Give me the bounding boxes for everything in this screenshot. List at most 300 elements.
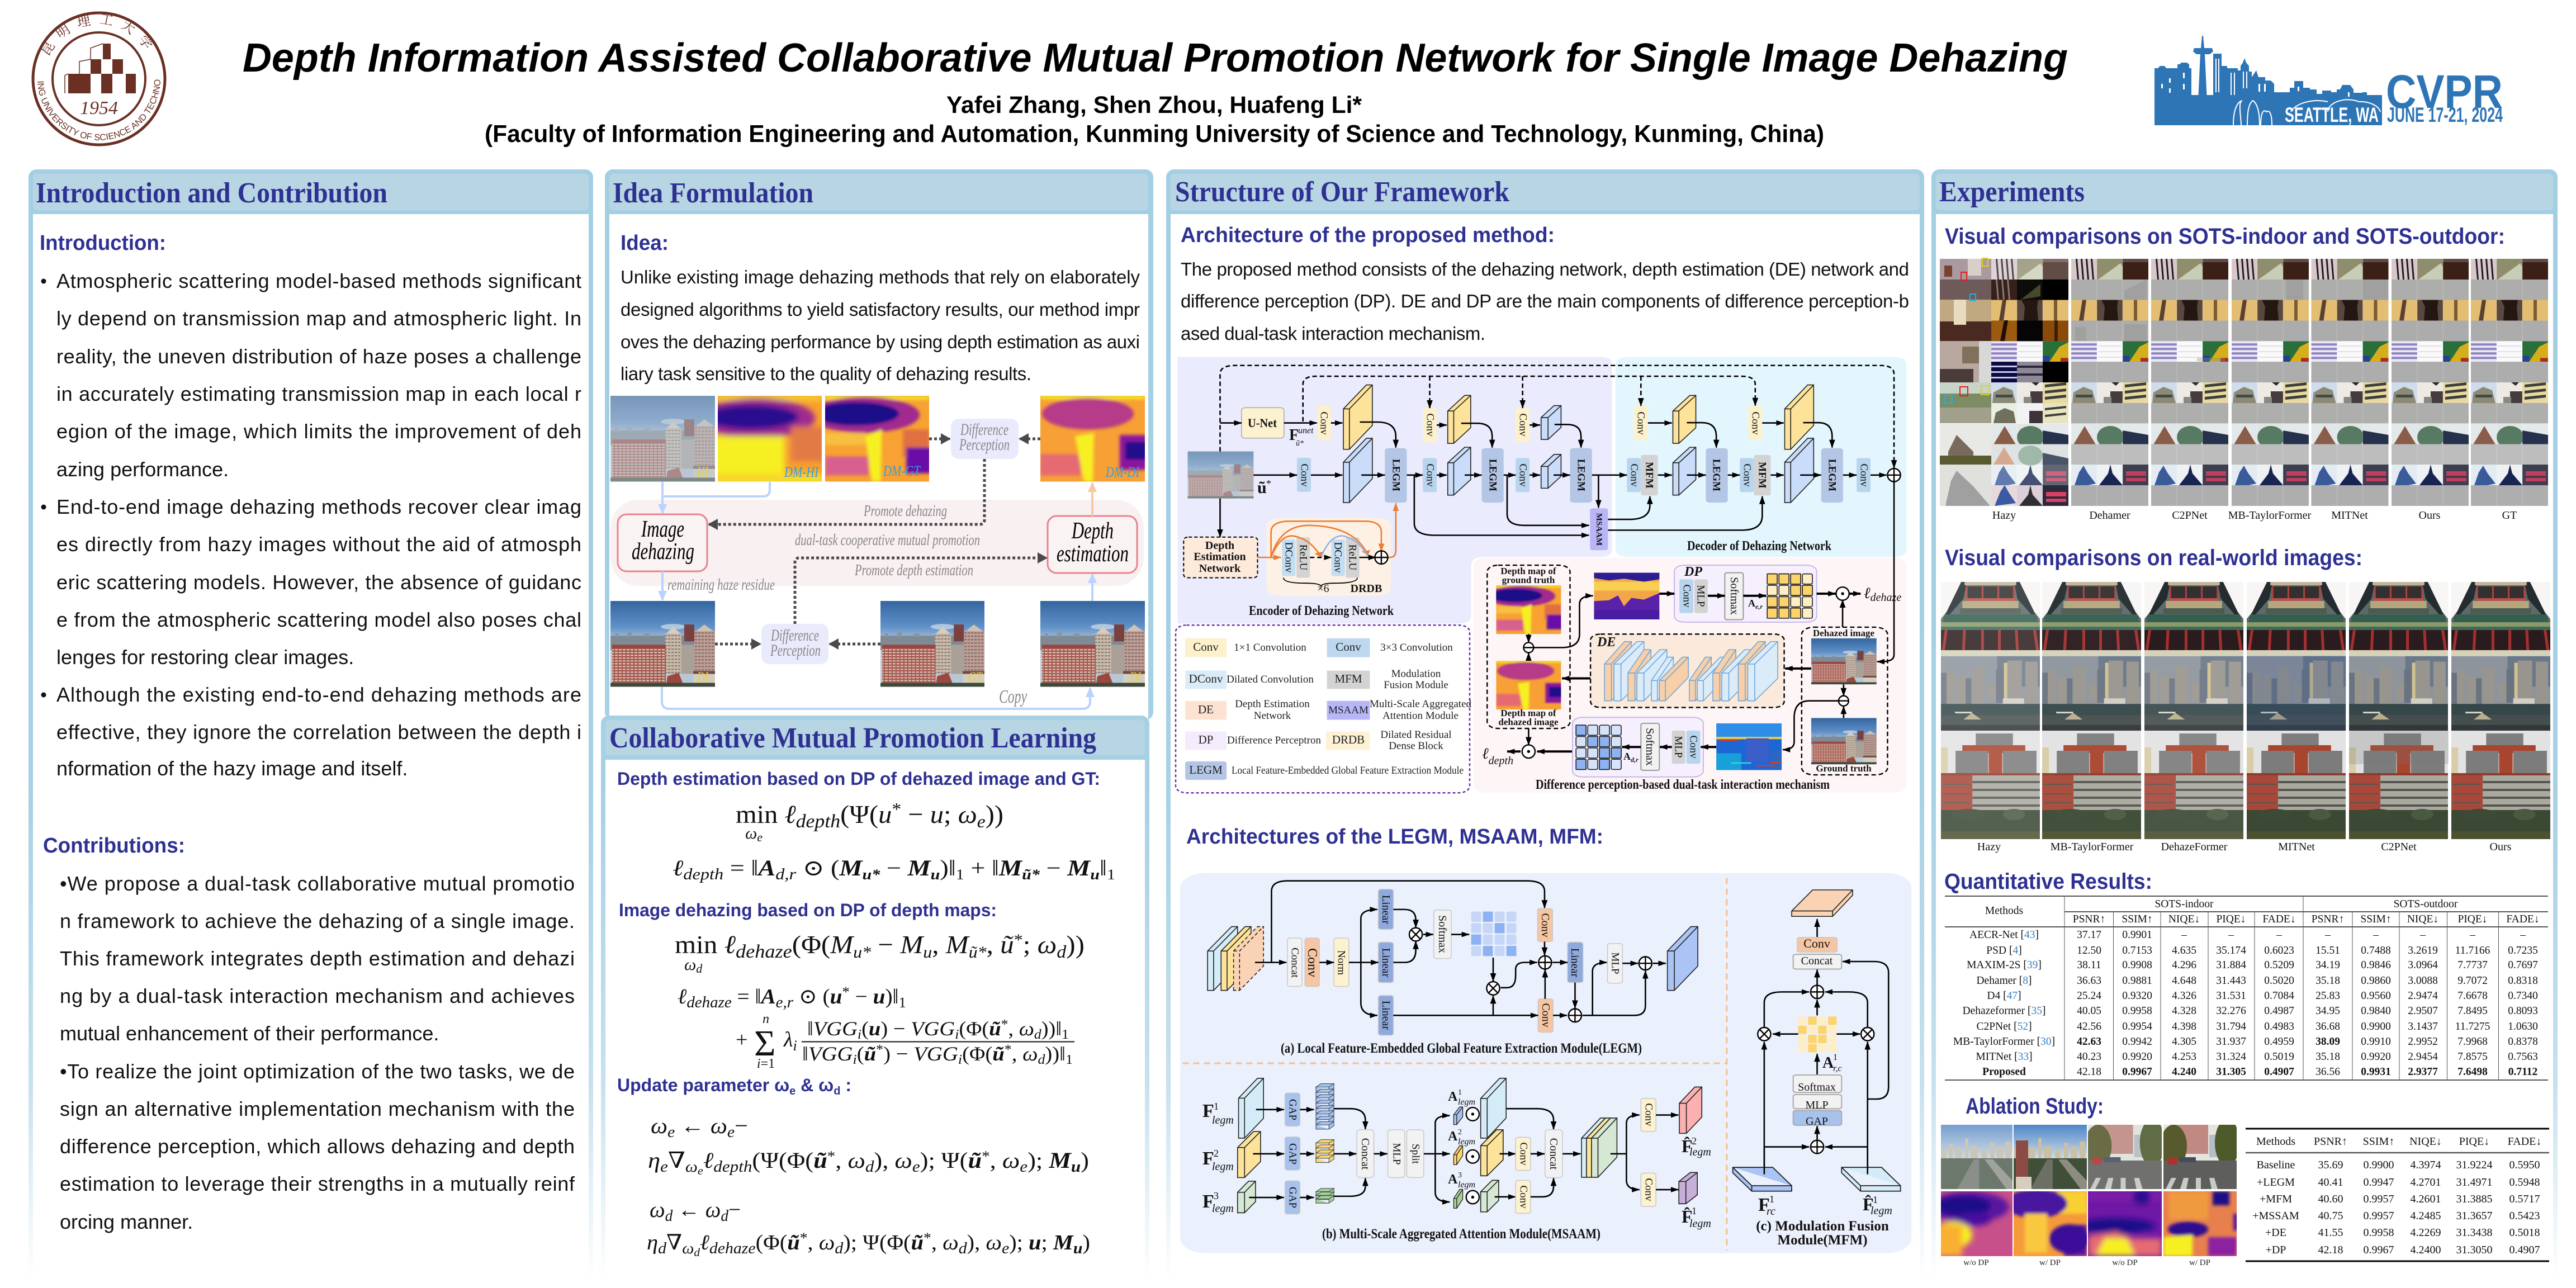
heading: Idea Formulation: [613, 177, 813, 209]
diagram shapes: [1176, 357, 1906, 793]
table: quantitative results: –: [2373, 929, 2379, 941]
table: quantitative results: [1945, 896, 2548, 1080]
table: ablation study: 31.9224: [2456, 1159, 2492, 1171]
equation: update omega d: ω: [682, 1240, 694, 1257]
subheading: ablation study: Ablation Study:: [1966, 1094, 2104, 1119]
equation: update omega e: ): [1081, 1148, 1089, 1173]
legend: DP: [1199, 733, 1213, 746]
equation: dehazing loss: *: [842, 984, 850, 1000]
equation: dehazing objective: ;: [1023, 930, 1038, 959]
image grid: ablation study: [1929, 1119, 2239, 1267]
labels: dual-task interaction mechanism: ℓ: [1864, 585, 1871, 602]
labels: dehazing network blocks: F: [1289, 427, 1299, 444]
table: quantitative results: 34.19: [2315, 959, 2340, 971]
equation: dehazing objective: ω: [1038, 930, 1057, 959]
CVPR logo: CVPR: [2386, 65, 2503, 118]
labels: dual-task interaction mechanism: MLP: [1673, 736, 1684, 758]
table: quantitative results: 36.56: [2315, 1066, 2340, 1078]
table: quantitative results: 0.7084: [2264, 990, 2294, 1002]
subheading: idea: Idea:: [621, 231, 669, 255]
labels: dehazing network blocks: Conv: [1628, 463, 1640, 487]
table: quantitative results: 7.7737: [2457, 959, 2488, 971]
equation: dehazing loss: 1: [1062, 1027, 1069, 1042]
labels: dehazing network blocks: Conv: [1858, 463, 1869, 487]
table: quantitative results: 2.9377: [2408, 1066, 2438, 1078]
legend: Dilated Convolution: [1227, 674, 1314, 685]
box: difference perception top: Difference: [960, 420, 1008, 439]
text block: architecture description: The proposed method consists of the dehazing network, depth estimation (DE) network and: [1181, 259, 1909, 280]
equation: depth objective: *: [892, 799, 901, 819]
table: quantitative results: –: [2419, 929, 2426, 941]
equation: dehazing loss: (: [861, 1017, 869, 1040]
legend: Difference Perceptron: [1227, 735, 1321, 746]
table: ablation study: 31.3050: [2456, 1244, 2492, 1256]
equation: depth objective: u: [878, 800, 892, 828]
labels: module math symbols: legm: [1689, 1218, 1711, 1230]
image grid: real-world comparisons: Hazy: [1977, 841, 2001, 853]
labels: module math symbols: F̂: [1682, 1206, 1693, 1227]
equation: dehazing loss: d: [1034, 1027, 1042, 1042]
table: quantitative results: 0.9901: [2122, 929, 2152, 941]
equation: dehazing objective: )): [1066, 930, 1085, 959]
equation: depth loss: ⊙ (: [796, 855, 839, 880]
text block: idea: liary task sensitive to the quality of dehazing results.: [621, 363, 1031, 384]
labels: module blocks: [1287, 895, 1836, 1209]
table: ablation study: 0.9967: [2364, 1244, 2394, 1256]
labels: dual-task interaction mechanism: DE: [1597, 635, 1616, 650]
equation: dehazing objective: ũ*: [969, 943, 987, 962]
table: quantitative results: 0.9958: [2122, 1005, 2152, 1017]
labels: module math symbols: F: [1202, 1101, 1214, 1121]
table: ablation study: 4.3974: [2411, 1159, 2441, 1171]
table: quantitative results: 0.9846: [2361, 959, 2391, 971]
image row: dehazed images and ground truth: DI: [1129, 669, 1142, 685]
table: quantitative results: Dehazeformer [35]: [1963, 1005, 2045, 1017]
labels: module math symbols: A: [1448, 1172, 1458, 1187]
hazy column: [1940, 258, 1991, 506]
text block: contributions: orcing manner.: [60, 1210, 193, 1233]
labels: dehazing network blocks: Conv: [1424, 463, 1436, 487]
table: quantitative results: NIQE↓: [2407, 913, 2438, 925]
equation: update omega d: );: [1009, 1231, 1029, 1254]
table: ablation study: 0.4907: [2509, 1244, 2540, 1256]
labels: module blocks: Conv: [1517, 1185, 1530, 1209]
captions: [1992, 509, 2517, 522]
table: quantitative results: 0.4983: [2264, 1021, 2294, 1033]
table: quantitative results: 0.5020: [2264, 975, 2294, 987]
table: quantitative results: 31.531: [2216, 990, 2246, 1002]
labels: module blocks: GAP: [1287, 1143, 1298, 1164]
table: ablation study: +DE: [2265, 1227, 2286, 1239]
table: quantitative results: 0.9967: [2122, 1066, 2152, 1078]
table: quantitative results: 4.328: [2172, 1005, 2196, 1017]
equation: dehazing loss: dehaze: [686, 994, 732, 1011]
equation: dehazing loss: ‖VGG: [807, 1017, 855, 1040]
labels: module blocks: GAP: [1287, 1187, 1298, 1208]
text block: contributions: difference perception, which allows dehazing and depth: [60, 1135, 575, 1158]
equation: dehazing loss: (Φ(: [962, 1043, 992, 1065]
labels: module blocks: GAP: [1806, 1115, 1828, 1128]
authors: Yafei Zhang, Shen Zhou, Huafeng Li*: [946, 92, 1362, 119]
equation: depth objective: ω: [745, 824, 757, 842]
table: quantitative results: 9.7072: [2457, 975, 2488, 987]
box: image dehazing: dehazing: [632, 539, 694, 565]
table: quantitative results: 37.17: [2077, 929, 2101, 941]
depth map: city without DP: [1941, 1191, 2012, 1256]
table: ablation study: 40.41: [2318, 1176, 2343, 1188]
equation: update omega e: e: [667, 1124, 675, 1141]
text block: introduction bullets: effective, they ignore the correlation between the depth i: [56, 721, 581, 744]
table: ablation study: Methods: [2256, 1135, 2295, 1148]
CVPR logo: SEATTLE, WA: [2285, 103, 2379, 126]
labels: dual-task interaction mechanism: A: [1748, 598, 1755, 609]
labels: module blocks: Linear: [1569, 948, 1581, 977]
table: quantitative results: SSIM↑: [2122, 913, 2153, 925]
equation: update omega e: ω: [711, 1113, 727, 1138]
table: quantitative results: PIQE↓: [2457, 913, 2488, 925]
table: ablation study: 31.3657: [2456, 1210, 2492, 1222]
labels: dual-task interaction mechanism: MLP: [1695, 585, 1706, 607]
subheading: architecture: Architecture of the proposed method:: [1181, 224, 1555, 247]
captions: Dehamer: [2089, 509, 2130, 522]
labels: module math symbols: F̂: [1682, 1136, 1693, 1156]
labels: module math symbols: legm: [1458, 1097, 1475, 1107]
equation: update omega e: u: [1071, 1158, 1081, 1176]
captions: C2PNet: [2172, 509, 2208, 522]
equation: depth loss: ℓ: [673, 855, 684, 880]
equation: update omega e: *: [827, 1148, 835, 1164]
table: quantitative results: 0.7488: [2361, 945, 2391, 956]
labels: dual-task interaction mechanism: ground truth: [1502, 575, 1555, 585]
table: quantitative results: 1.0630: [2508, 1021, 2538, 1033]
text block: contributions: •To realize the joint optimization of the two tasks, we de: [60, 1060, 575, 1083]
labels: module math symbols: [1202, 1053, 1892, 1230]
equation: update omega e: (Ψ(Φ(: [752, 1148, 813, 1173]
labels: module math symbols: F̂: [1863, 1194, 1874, 1214]
legend: DConv: [1189, 672, 1223, 685]
labels: module math symbols: 1: [1833, 1053, 1838, 1062]
equation: update omega d: d: [658, 1240, 667, 1257]
equation: dehazing loss: *: [1005, 1043, 1012, 1057]
labels: module blocks: Concat: [1359, 1138, 1371, 1170]
table: ablation study: 31.3438: [2456, 1227, 2492, 1239]
table: ablation study: 40.75: [2318, 1210, 2343, 1222]
equation: update omega d: ω: [986, 1231, 1002, 1254]
labels: dehazing network blocks: LEGM: [1575, 459, 1587, 491]
equation: depth objective: (Ψ(: [840, 800, 878, 828]
table: quantitative results: 42.56: [2077, 1021, 2101, 1033]
diagram: LEGM, MSAAM, MFM modules: [1180, 873, 1911, 1253]
table: quantitative results: 42.63: [2077, 1036, 2101, 1048]
table: quantitative results: 40.05: [2077, 1005, 2101, 1017]
legend: Local Feature-Embedded Global Feature Extraction Module: [1232, 765, 1464, 776]
CVPR logo: JUNE 17-21, 2024: [2387, 103, 2503, 126]
table: quantitative results: 3.0964: [2408, 959, 2438, 971]
equation: dehazing loss: ũ: [992, 1043, 1005, 1065]
table: quantitative results: 0.9900: [2361, 1021, 2391, 1033]
equation: update omega e: [648, 1113, 1089, 1177]
table: quantitative results: 0.8378: [2508, 1036, 2538, 1048]
equation: dehazing loss: ,: [1008, 1017, 1019, 1040]
equation: update omega e: ∇: [668, 1148, 685, 1173]
labels: dehazing network blocks: ũ*: [1296, 439, 1304, 448]
table: ablation study: 42.18: [2318, 1244, 2343, 1256]
labels: dual-task interaction mechanism: dehaze: [1871, 591, 1901, 604]
labels: module math symbols: rc: [1767, 1205, 1775, 1218]
table: quantitative results: 0.7340: [2508, 990, 2538, 1002]
equation: dehazing objective: −: [871, 930, 900, 959]
text block: introduction bullets: Atmospheric scattering model-based methods significant: [56, 269, 581, 292]
equation: update omega d: d: [835, 1240, 844, 1257]
equation: depth loss: u*: [863, 866, 880, 883]
table: quantitative results: 0.8093: [2508, 1005, 2538, 1017]
text block: introduction bullets: nformation of the hazy image and itself.: [56, 757, 408, 780]
equation: update omega e: e: [727, 1124, 735, 1141]
equation: dehazing objective: ,: [932, 930, 946, 959]
equation: dehazing objective: (Φ(: [792, 930, 830, 959]
labels: module math symbols: 1: [1692, 1205, 1697, 1216]
labels: module blocks: Softmax: [1798, 1081, 1836, 1093]
legend: Fusion Module: [1384, 679, 1448, 691]
image grid: real-world comparisons: DehazeFormer: [2161, 841, 2228, 853]
table: ablation study: 31.4971: [2456, 1176, 2492, 1188]
equation: update omega e: e: [912, 1158, 920, 1176]
image grid: real-world comparisons: Ours: [2490, 841, 2512, 853]
labels: module blocks: Concat: [1289, 948, 1300, 978]
table: quantitative results: 0.9920: [2122, 1051, 2152, 1063]
labels: dehazing network blocks: LEGM: [1390, 459, 1402, 491]
table: quantitative results: 38.11: [2077, 959, 2101, 971]
equation: update omega d: ω: [819, 1231, 835, 1254]
labels: dehazing network blocks: DConv: [1332, 542, 1344, 573]
table: ablation study: 0.5018: [2509, 1227, 2540, 1239]
equation: dehazing loss: = ‖: [732, 985, 761, 1008]
equation: depth loss: A: [756, 855, 775, 880]
labels: dehazing network blocks: ũ: [1257, 479, 1267, 497]
table: quantitative results: –: [2276, 929, 2282, 941]
table: quantitative results: 2.9507: [2408, 1005, 2438, 1017]
labels: idea flow: dual-task cooperative mutual promotion: [795, 532, 980, 549]
text block: architecture description: ased dual-task interaction mechanism.: [1181, 323, 1485, 344]
labels: dehazing network blocks: Conv: [1298, 463, 1310, 487]
labels: module math symbols: A: [1822, 1054, 1834, 1072]
equation: depth loss: −: [1040, 855, 1067, 880]
equation: dehazing loss: i: [858, 1027, 861, 1042]
equation: dehazing loss: d: [1038, 1053, 1045, 1067]
table: ablation study: 40.60: [2318, 1193, 2343, 1205]
table: quantitative results: –: [2469, 929, 2475, 941]
labels: dehazing network blocks: Network: [1199, 562, 1241, 575]
caption: LEGM: (a) Local Feature-Embedded Global Feature Extraction Module(LEGM): [1281, 1041, 1642, 1056]
labels: dual-task interaction mechanism: Ground truth: [1816, 763, 1872, 774]
labels: dehazing network blocks: Depth: [1205, 539, 1234, 552]
image grid: real-world comparisons: [1941, 582, 2550, 853]
equation: update omega d: η: [647, 1231, 658, 1254]
labels: dehazing network blocks: Decoder of Dehazing Network: [1687, 539, 1832, 553]
table: quantitative results: SOTS-indoor: [2154, 898, 2214, 910]
heading: Structure of Our Framework: [1175, 176, 1509, 208]
labels: module blocks: Softmax: [1436, 915, 1448, 953]
table: quantitative results: SOTS-outdoor: [2394, 898, 2458, 910]
equation: dehazing objective: M: [899, 930, 925, 959]
labels: dual-task interaction mechanism: e,r: [1755, 603, 1763, 610]
table: quantitative results: C2PNet [52]: [1976, 1021, 2032, 1033]
table: quantitative results: 15.51: [2315, 945, 2340, 956]
equation: dehazing loss: −: [850, 985, 873, 1008]
captions: MB-TaylorFormer: [2228, 509, 2312, 522]
panel: experiments: [1929, 169, 2558, 1280]
text block: introduction bullets: es directly from hazy images without the aid of atmosph: [56, 533, 581, 556]
hazy patches: [1991, 259, 2068, 506]
image row: dehazed images and ground truth: [610, 601, 1145, 686]
table: quantitative results: 3.0088: [2408, 975, 2438, 987]
diagram: idea flow: [610, 396, 1148, 709]
labels: module math symbols: F: [1202, 1191, 1214, 1212]
table: quantitative results: PSNR↑: [2312, 913, 2344, 925]
table: quantitative results: 31.443: [2216, 975, 2246, 987]
equation: update omega d: ũ: [911, 1231, 924, 1254]
labels: module blocks: MLP: [1609, 952, 1621, 974]
image row: hazy image and depth maps: DM-HI: [784, 464, 819, 480]
table: ablation study: +MFM: [2260, 1193, 2292, 1205]
labels: module math symbols: 3: [1214, 1190, 1219, 1201]
table: quantitative results: 4.398: [2172, 1021, 2196, 1033]
equation: update omega d: u: [1073, 1240, 1083, 1257]
labels: module blocks: Concat: [1547, 1138, 1560, 1170]
equation: dehazing objective: ũ: [1000, 930, 1014, 959]
labels: module blocks: Linear: [1380, 948, 1392, 977]
labels: module math symbols: legm: [1689, 1146, 1711, 1158]
table: ablation study: +DP: [2266, 1244, 2286, 1256]
labels: idea flow: remaining haze residue: [667, 576, 775, 594]
table: quantitative results: Dehamer [8]: [1976, 975, 2032, 987]
table: ablation study: +MSSAM: [2252, 1210, 2299, 1222]
labels: module blocks: Concat: [1801, 955, 1833, 967]
equation: depth loss: 1: [956, 866, 964, 883]
table: quantitative results: 38.09: [2315, 1036, 2340, 1048]
labels: module blocks: MLP: [1805, 1099, 1829, 1111]
box: difference perception top: [951, 419, 1019, 459]
subheading: update parameter: e: [789, 1085, 795, 1097]
equation: update omega e: ,: [835, 1148, 847, 1173]
labels: dehazing network blocks: unet: [1298, 426, 1314, 435]
equation: dehazing objective: *: [1014, 931, 1023, 949]
module shapes: [1180, 873, 1911, 1253]
table: quantitative results: 7.6678: [2457, 990, 2488, 1002]
table: quantitative results: 25.24: [2077, 990, 2101, 1002]
text block: introduction bullets: in accurately estimating transmission map in each local r: [56, 382, 581, 405]
table: quantitative results: 35.18: [2315, 1051, 2340, 1063]
table: quantitative results: 31.324: [2216, 1051, 2246, 1063]
equation: depth loss: −: [880, 855, 908, 880]
equation: update omega e: M: [1048, 1148, 1072, 1173]
text block: contributions: n framework to achieve the dehazing of a single image.: [60, 910, 575, 932]
subheading: introduction: Introduction:: [40, 231, 166, 255]
table: quantitative results: PSD [4]: [1986, 945, 2022, 956]
labels: dehazing network blocks: ×6: [1317, 583, 1329, 595]
heading: Introduction and Contribution: [36, 177, 387, 209]
equation: update omega e: ω: [894, 1148, 912, 1173]
equation: depth objective: min ℓ: [736, 800, 795, 828]
subheading: contributions: Contributions:: [43, 834, 185, 858]
equation: update omega e: *: [982, 1148, 990, 1164]
text block: architecture description: difference perception (DP). DE and DP are the main components of difference perception-b: [1181, 291, 1909, 311]
equation: update omega d: (Φ(: [756, 1231, 787, 1254]
equation: update omega d: u; M: [1029, 1231, 1072, 1254]
legend: Multi-Scale Aggregated: [1370, 698, 1472, 710]
labels: module blocks: Conv: [1305, 948, 1319, 977]
labels: dehazing network blocks: Conv: [1517, 463, 1528, 487]
table: ablation study: 0.5423: [2509, 1210, 2540, 1222]
labels: module blocks: Linear: [1380, 895, 1392, 924]
text block: introduction bullets: eric scattering models. However, the absence of guidanc: [56, 571, 581, 594]
image row: hazy image and depth maps: DM-DI: [1105, 464, 1140, 480]
labels: module math symbols: 1: [1873, 1194, 1878, 1205]
text block: introduction bullets: End-to-end image dehazing methods recover clear imag: [56, 495, 581, 518]
diagram: overall architecture: [1176, 357, 1906, 793]
table: quantitative results: 0.7235: [2508, 945, 2538, 956]
equation: update omega e: −: [735, 1113, 748, 1138]
labels: idea flow: Promote depth estimation: [854, 562, 973, 579]
labels: module blocks: GAP: [1287, 1099, 1298, 1120]
image grid: ablation study: w/ DP: [2189, 1258, 2210, 1267]
table: quantitative results: 4.253: [2172, 1051, 2196, 1063]
depth map: city with DP: [2014, 1191, 2087, 1256]
table: quantitative results: –: [2181, 929, 2187, 941]
labels: dehazing network blocks: LEGM: [1487, 459, 1498, 491]
text block: introduction bullets: e from the atmospheric scattering model also poses chal: [56, 608, 581, 631]
equation: update omega d: ); Ψ(Φ(: [843, 1231, 911, 1254]
labels: module blocks: MLP: [1391, 1143, 1402, 1165]
equation: depth objective: −: [901, 800, 930, 828]
depth map: road with DP: [2163, 1191, 2237, 1256]
subheading: real-world comparisons: Visual comparisons on real-world images:: [1945, 546, 2362, 570]
table: quantitative results: 0.9881: [2122, 975, 2152, 987]
text block: introduction bullets: lenges for restoring clear images.: [56, 646, 354, 669]
captions: Ours: [2419, 509, 2441, 522]
heading: Collaborative Mutual Promotion Learning: [609, 722, 1096, 754]
labels: dehazing network blocks: *: [1266, 478, 1271, 489]
image row: dehazed images and ground truth: DI: [697, 669, 709, 685]
labels: module math symbols: 1: [1458, 1088, 1462, 1097]
table: ablation study: PSNR↑: [2314, 1135, 2347, 1148]
table: quantitative results: 2.9474: [2408, 990, 2438, 1002]
table: quantitative results: 40.23: [2077, 1051, 2101, 1063]
captions: Hazy: [1992, 509, 2016, 522]
caption: MFM: [1756, 1219, 1889, 1248]
labels: module math symbols: 3: [1458, 1171, 1462, 1180]
box: depth estimation: [1048, 516, 1137, 573]
equation: update omega e: ω: [847, 1148, 865, 1173]
table: quantitative results: PSNR↑: [2073, 913, 2105, 925]
equation: update omega e: e: [660, 1158, 668, 1176]
table: quantitative results: 3.1437: [2408, 1021, 2438, 1033]
legend: MSAAM: [1328, 704, 1368, 716]
box: image dehazing: Image: [641, 517, 684, 542]
equation: update omega e: ←: [675, 1113, 711, 1138]
equation: update omega e: ω: [651, 1113, 667, 1138]
labels: module math symbols: 1: [1769, 1194, 1774, 1205]
caption: MFM: Module(MFM): [1777, 1233, 1868, 1248]
equation: dehazing loss: [678, 984, 1074, 1071]
table: quantitative results: 2.9952: [2408, 1036, 2438, 1048]
table: quantitative results: 7.6498: [2457, 1066, 2488, 1078]
labels: dehazing network blocks: Conv: [1741, 463, 1753, 487]
subheading: update parameter: d: [834, 1085, 840, 1097]
equation: update omega d: d: [665, 1208, 673, 1225]
equation: dehazing objective: [675, 930, 1085, 976]
table: quantitative results: 0.9931: [2361, 1066, 2391, 1078]
